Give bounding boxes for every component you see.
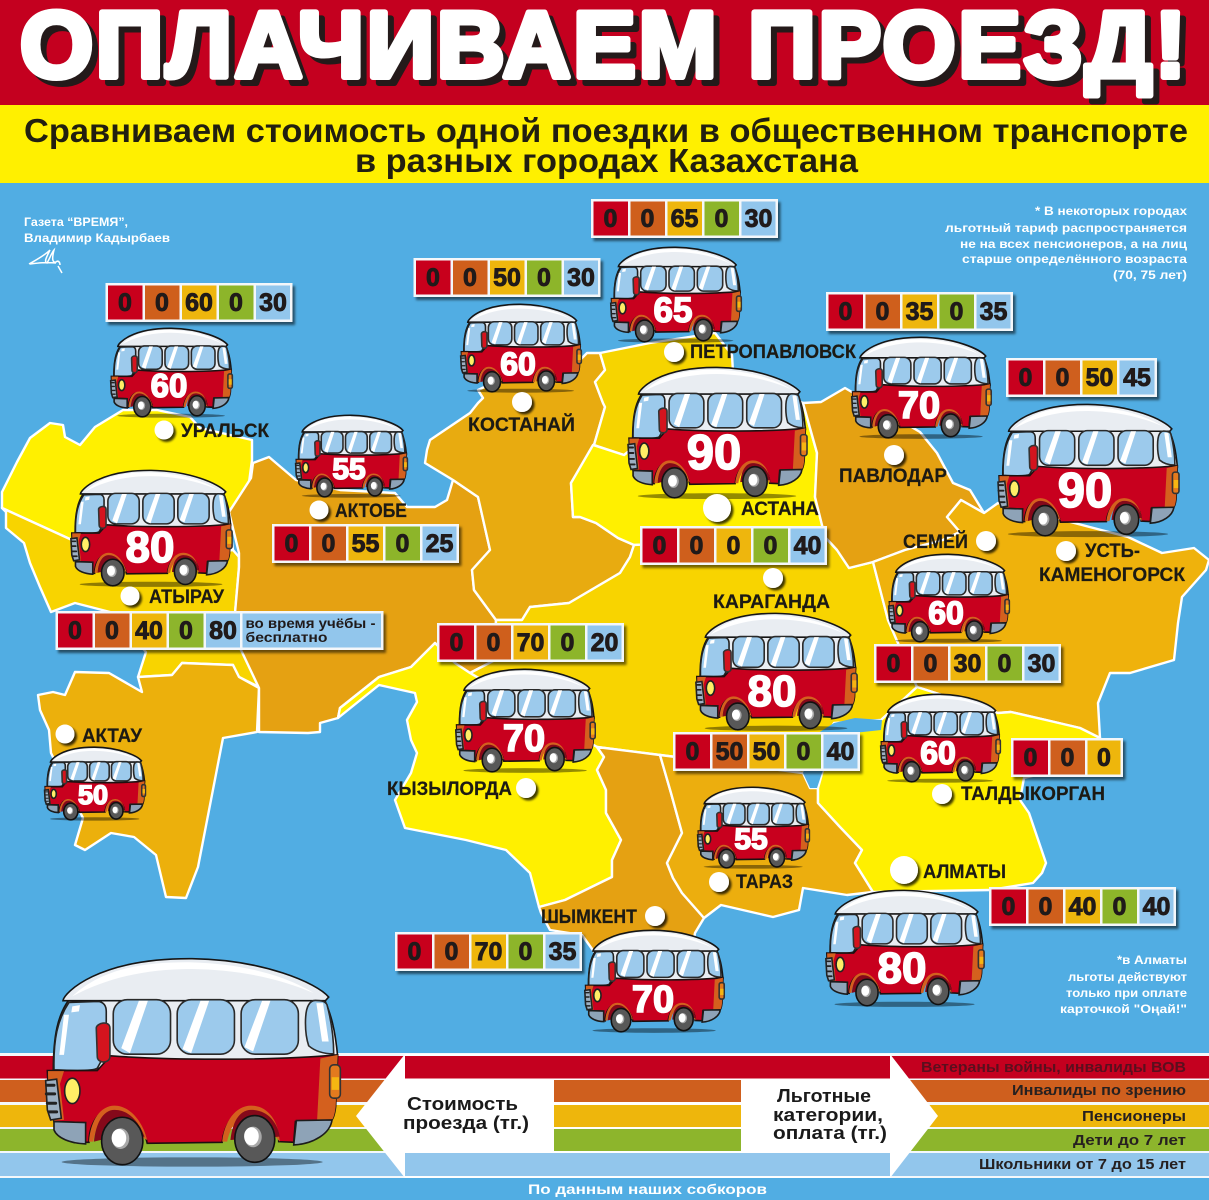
city label bbox=[1039, 540, 1185, 586]
Almaty footnote: льготы действуют bbox=[1068, 972, 1187, 984]
fare table: 0 bbox=[396, 530, 409, 558]
fare table: 30 bbox=[567, 264, 595, 292]
city label: ПАВЛОДАР bbox=[839, 465, 947, 487]
city label: КЫЗЫЛОРДА bbox=[387, 778, 512, 800]
fare table: 55 bbox=[352, 530, 379, 558]
benefits caption: оплата (тг.) bbox=[773, 1122, 887, 1143]
Almaty footnote bbox=[1060, 955, 1187, 1016]
bus bbox=[461, 304, 581, 393]
pensioner footnote: льготный тариф распространяется bbox=[945, 223, 1187, 235]
fare table: 40 bbox=[794, 532, 821, 560]
fare table: 60 bbox=[185, 289, 213, 317]
fare table: 0 bbox=[537, 264, 551, 292]
fare table: 0 bbox=[839, 298, 852, 326]
bus bbox=[585, 930, 724, 1033]
city: Кызылорда bbox=[387, 623, 624, 800]
fare table: 0 bbox=[1019, 364, 1032, 392]
bus bbox=[628, 367, 807, 499]
fare table: 0 bbox=[924, 650, 937, 678]
city label bbox=[468, 392, 575, 436]
category labels: Дети до 7 лет bbox=[1073, 1132, 1186, 1149]
fare table: 0 bbox=[426, 264, 440, 292]
fare table: 0 bbox=[764, 532, 777, 560]
source line: По данным наших собкоров bbox=[528, 1181, 767, 1197]
bus bbox=[889, 554, 1009, 643]
fare table: 0 bbox=[686, 738, 699, 766]
fare table: 0 bbox=[463, 264, 477, 292]
bus bbox=[611, 247, 741, 343]
city label: СЕМЕЙ bbox=[903, 529, 968, 553]
fare table: 0 bbox=[408, 938, 421, 966]
bus bbox=[71, 470, 232, 587]
city label: ТАРАЗ bbox=[736, 871, 793, 893]
fare table: 20 bbox=[591, 629, 618, 657]
city: Атырау bbox=[56, 470, 384, 650]
fare table: 0 bbox=[1002, 893, 1015, 921]
fare table: 40 bbox=[1143, 893, 1170, 921]
fare table with note: 0 bbox=[68, 617, 82, 645]
benefits caption: Льготные bbox=[777, 1085, 871, 1106]
bus bbox=[852, 337, 991, 439]
city label bbox=[839, 445, 947, 487]
large bus illustration bbox=[46, 959, 340, 1167]
legend strip bbox=[0, 1053, 1209, 1178]
fare table: 0 bbox=[1061, 744, 1074, 772]
city label: УРАЛЬСК bbox=[181, 420, 269, 442]
fare caption: Стоимость bbox=[407, 1093, 518, 1114]
city label bbox=[703, 494, 819, 522]
bus: 90 bbox=[687, 426, 741, 480]
fare table: 50 bbox=[493, 264, 521, 292]
source line bbox=[0, 1178, 1209, 1200]
city label: АЛМАТЫ bbox=[923, 861, 1006, 883]
city label bbox=[903, 529, 996, 553]
city: Караганда bbox=[640, 526, 860, 771]
city: Павлодар bbox=[826, 292, 1013, 487]
map of Kazakhstan bbox=[2, 333, 1209, 960]
fare table: 0 bbox=[1039, 893, 1052, 921]
pensioner footnote: * В некоторых городах bbox=[1035, 206, 1188, 218]
fare table: 0 bbox=[604, 205, 617, 233]
city: Талдыкорган bbox=[881, 694, 1123, 805]
city label bbox=[310, 500, 407, 522]
fare table: 30 bbox=[1028, 650, 1055, 678]
bus: 50 bbox=[78, 780, 108, 810]
city: Алматы bbox=[826, 856, 1176, 1007]
bus: 60 bbox=[151, 367, 187, 404]
fare table: 70 bbox=[517, 629, 544, 657]
pensioner footnote: не на всех пенсионеров, а на лиц bbox=[960, 239, 1187, 251]
fare table: 30 bbox=[259, 289, 287, 317]
bus: 55 bbox=[734, 823, 768, 856]
fare table: 45 bbox=[1123, 364, 1151, 392]
fare table bbox=[1006, 358, 1157, 397]
Almaty footnote: только при оплате bbox=[1066, 988, 1187, 1000]
fare table: 40 bbox=[1069, 893, 1096, 921]
fare table: 0 bbox=[887, 650, 900, 678]
fare table: 0 bbox=[690, 532, 703, 560]
fare table bbox=[106, 283, 292, 322]
bus: 55 bbox=[332, 453, 366, 486]
city label: ШЫМКЕНТ bbox=[541, 906, 637, 928]
fare table: 0 bbox=[561, 629, 574, 657]
fare table: 70 bbox=[475, 938, 502, 966]
benefits caption bbox=[773, 1085, 887, 1143]
city label: АКТАУ bbox=[82, 725, 143, 747]
fare table: 0 bbox=[450, 629, 463, 657]
fare table: 0 bbox=[998, 650, 1011, 678]
city: Уральск bbox=[106, 283, 292, 442]
city: Актобе bbox=[272, 415, 459, 563]
bus bbox=[881, 694, 1000, 783]
fare table bbox=[414, 258, 600, 297]
fare table: 0 bbox=[653, 532, 666, 560]
fare table: 65 bbox=[671, 205, 698, 233]
bus bbox=[296, 415, 407, 498]
legend arrows bbox=[356, 1054, 938, 1178]
fare table: 0 bbox=[876, 298, 889, 326]
bus bbox=[456, 669, 595, 773]
fare table: 0 bbox=[715, 205, 728, 233]
bus: 70 bbox=[503, 718, 545, 760]
category labels: Пенсионеры bbox=[1082, 1108, 1186, 1125]
city: Петропавловск bbox=[591, 199, 856, 363]
benefits caption: категории, bbox=[773, 1104, 883, 1125]
credits note: Газета “ВРЕМЯ”, bbox=[24, 217, 128, 229]
bus: 70 bbox=[898, 385, 940, 427]
city: Шымкент bbox=[395, 906, 724, 1033]
bus: 80 bbox=[878, 944, 926, 993]
city: Семей bbox=[874, 529, 1061, 683]
fare caption: проезда (тг.) bbox=[403, 1112, 529, 1133]
fare table bbox=[272, 524, 459, 563]
category labels: Школьники от 7 до 15 лет bbox=[979, 1156, 1186, 1173]
bus: 60 bbox=[920, 735, 956, 771]
fare table: 25 bbox=[426, 530, 453, 558]
subtitle band bbox=[0, 105, 1209, 183]
fare table with note: 80 bbox=[209, 617, 237, 645]
fare table: 50 bbox=[753, 738, 780, 766]
subtitle band: Сравниваем стоимость одной поездки в общественном транспорте bbox=[24, 112, 1188, 149]
bus: 80 bbox=[748, 667, 796, 716]
fare table: 0 bbox=[229, 289, 243, 317]
fare table with note: бесплатно bbox=[246, 629, 328, 645]
bus: 60 bbox=[500, 346, 536, 382]
fare table bbox=[640, 526, 827, 565]
category labels: Ветераны войны, инвалиды ВОВ bbox=[921, 1059, 1186, 1076]
Almaty footnote: *в Алматы bbox=[1117, 955, 1187, 967]
pensioner footnote bbox=[945, 206, 1188, 282]
fare table: 0 bbox=[519, 938, 532, 966]
fare table: 50 bbox=[716, 738, 743, 766]
fare table: 0 bbox=[950, 298, 963, 326]
bus: 80 bbox=[126, 523, 174, 572]
fare table bbox=[826, 292, 1013, 331]
fare table: 0 bbox=[487, 629, 500, 657]
city label: КАРАГАНДА bbox=[713, 591, 830, 613]
fare table bbox=[395, 932, 582, 971]
Almaty footnote: карточкой "Оңай!" bbox=[1060, 1004, 1187, 1016]
fare table bbox=[673, 732, 860, 771]
fare table bbox=[874, 644, 1061, 683]
city label: КОСТАНАЙ bbox=[468, 412, 575, 436]
city label: АТЫРАУ bbox=[149, 586, 225, 608]
fare table: 35 bbox=[980, 298, 1007, 326]
fare table bbox=[1011, 738, 1123, 777]
fare table: 0 bbox=[1024, 744, 1037, 772]
fare table: 0 bbox=[1113, 893, 1126, 921]
bus bbox=[826, 890, 984, 1007]
credits note bbox=[24, 217, 170, 273]
fare table: 50 bbox=[1086, 364, 1113, 392]
category labels bbox=[921, 1059, 1186, 1173]
bus bbox=[111, 328, 232, 418]
fare table: 30 bbox=[745, 205, 772, 233]
credits note: Владимир Кадырбаев bbox=[24, 233, 170, 245]
city: Актау bbox=[45, 724, 145, 821]
fare table: 0 bbox=[118, 289, 132, 317]
city label: АСТАНА bbox=[741, 498, 819, 520]
fare table with note: 40 bbox=[135, 617, 163, 645]
fare table bbox=[591, 199, 778, 238]
city label bbox=[120, 586, 225, 608]
bus: 90 bbox=[1058, 464, 1112, 518]
fare table: 0 bbox=[322, 530, 335, 558]
fare table: 0 bbox=[1097, 744, 1111, 772]
city label bbox=[890, 856, 1006, 884]
fare table bbox=[989, 887, 1176, 926]
fare table: 0 bbox=[1056, 364, 1069, 392]
fare table: 40 bbox=[827, 738, 854, 766]
category labels: Инвалиды по зрению bbox=[1012, 1082, 1186, 1099]
subtitle band: в разных городах Казахстана bbox=[355, 142, 859, 179]
fare table: 35 bbox=[549, 938, 576, 966]
city label: УСТЬ- bbox=[1085, 540, 1140, 562]
fare table bbox=[437, 623, 624, 662]
pensioner footnote: (70, 75 лет) bbox=[1113, 270, 1187, 282]
bus: 65 bbox=[654, 291, 692, 330]
bus: 60 bbox=[928, 595, 964, 631]
fare table: 0 bbox=[285, 530, 298, 558]
fare table: 35 bbox=[906, 298, 933, 326]
city: Усть-Каменогорск bbox=[998, 358, 1185, 586]
fare table: 0 bbox=[445, 938, 458, 966]
fare table with note: 0 bbox=[179, 617, 193, 645]
city label: ПЕТРОПАВЛОВСК bbox=[690, 341, 856, 363]
fare table: 30 bbox=[954, 650, 981, 678]
city: Тараз bbox=[698, 787, 809, 893]
city: Астана bbox=[628, 367, 819, 522]
city label bbox=[713, 568, 830, 613]
city: Костанай bbox=[414, 258, 600, 436]
pensioner footnote: старше определённого возраста bbox=[962, 254, 1188, 266]
fare table: 0 bbox=[155, 289, 169, 317]
bus: 70 bbox=[632, 979, 674, 1021]
bus bbox=[998, 404, 1179, 537]
fare caption bbox=[403, 1093, 529, 1133]
fare table with note bbox=[56, 611, 384, 650]
fare table: 0 bbox=[727, 532, 740, 560]
fare table with note: 0 bbox=[105, 617, 119, 645]
bus bbox=[696, 613, 857, 731]
title band: ОПЛАЧИВАЕМ ПРОЕЗД! bbox=[26, 0, 1192, 103]
city label: ТАЛДЫКОРГАН bbox=[961, 783, 1105, 805]
fare table: 0 bbox=[641, 205, 654, 233]
city label: АКТОБЕ bbox=[335, 500, 407, 522]
fare table: 0 bbox=[797, 738, 810, 766]
city label: КАМЕНОГОРСК bbox=[1039, 564, 1185, 586]
fare table with note: во время учёбы - bbox=[246, 615, 376, 631]
